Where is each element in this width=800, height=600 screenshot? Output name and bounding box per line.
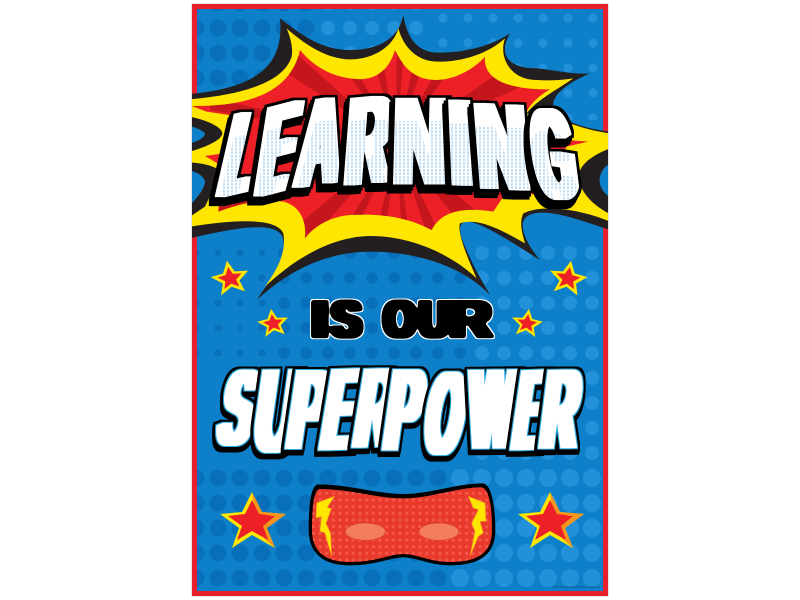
subheading: IS OUR: I — [311, 291, 329, 349]
subheading: IS OUR: R — [450, 290, 491, 348]
star: upper right — [547, 257, 590, 297]
burst red core with rays — [192, 50, 588, 238]
heading: SUPERPOWER: R — [348, 344, 405, 472]
subheading: IS OUR: U — [420, 290, 449, 348]
star: middle left — [256, 307, 290, 338]
illustration: comic explosion burst — [190, 15, 610, 300]
heading: LEARNING: E — [250, 73, 307, 225]
panel: poster background with red border — [191, 3, 609, 597]
heading: LEARNING: I — [447, 75, 475, 213]
star: lower left — [220, 492, 286, 548]
left and right side notches of the burst — [190, 117, 610, 217]
star: upper left — [208, 257, 251, 297]
mask eye holes — [345, 523, 459, 540]
heading: LEARNING: L — [210, 82, 275, 224]
heading: SUPERPOWER: P — [282, 346, 336, 472]
heading: SUPERPOWER: P — [379, 346, 431, 476]
icon: red superhero mask — [309, 483, 495, 565]
subheading: IS OUR: S — [332, 291, 361, 349]
heading: SUPERPOWER: R — [536, 345, 586, 473]
heading: SUPERPOWER: E — [315, 344, 368, 476]
heading: LEARNING: N — [392, 71, 450, 211]
heading: SUPERPOWER: S — [211, 347, 267, 468]
heading: LEARNING: R — [342, 68, 396, 212]
subheading: IS OUR: O — [384, 290, 416, 348]
heading: SUPERPOWER: U — [248, 343, 308, 477]
heading: LEARNING: G — [525, 79, 583, 229]
heading: SUPERPOWER: E — [508, 346, 554, 475]
heading: SUPERPOWER: O — [419, 347, 473, 478]
heading: LEARNING — [210, 68, 583, 229]
heading: LEARNING: A — [292, 68, 349, 214]
star: middle right — [510, 307, 544, 338]
subheading: IS OUR — [311, 290, 491, 349]
star: lower right — [518, 492, 584, 548]
heading: SUPERPOWER — [211, 343, 586, 478]
heading: LEARNING: N — [472, 77, 532, 217]
small print: copyright line — [552, 586, 600, 588]
mask lightning bolts — [316, 496, 486, 556]
heading: SUPERPOWER: W — [466, 345, 520, 473]
